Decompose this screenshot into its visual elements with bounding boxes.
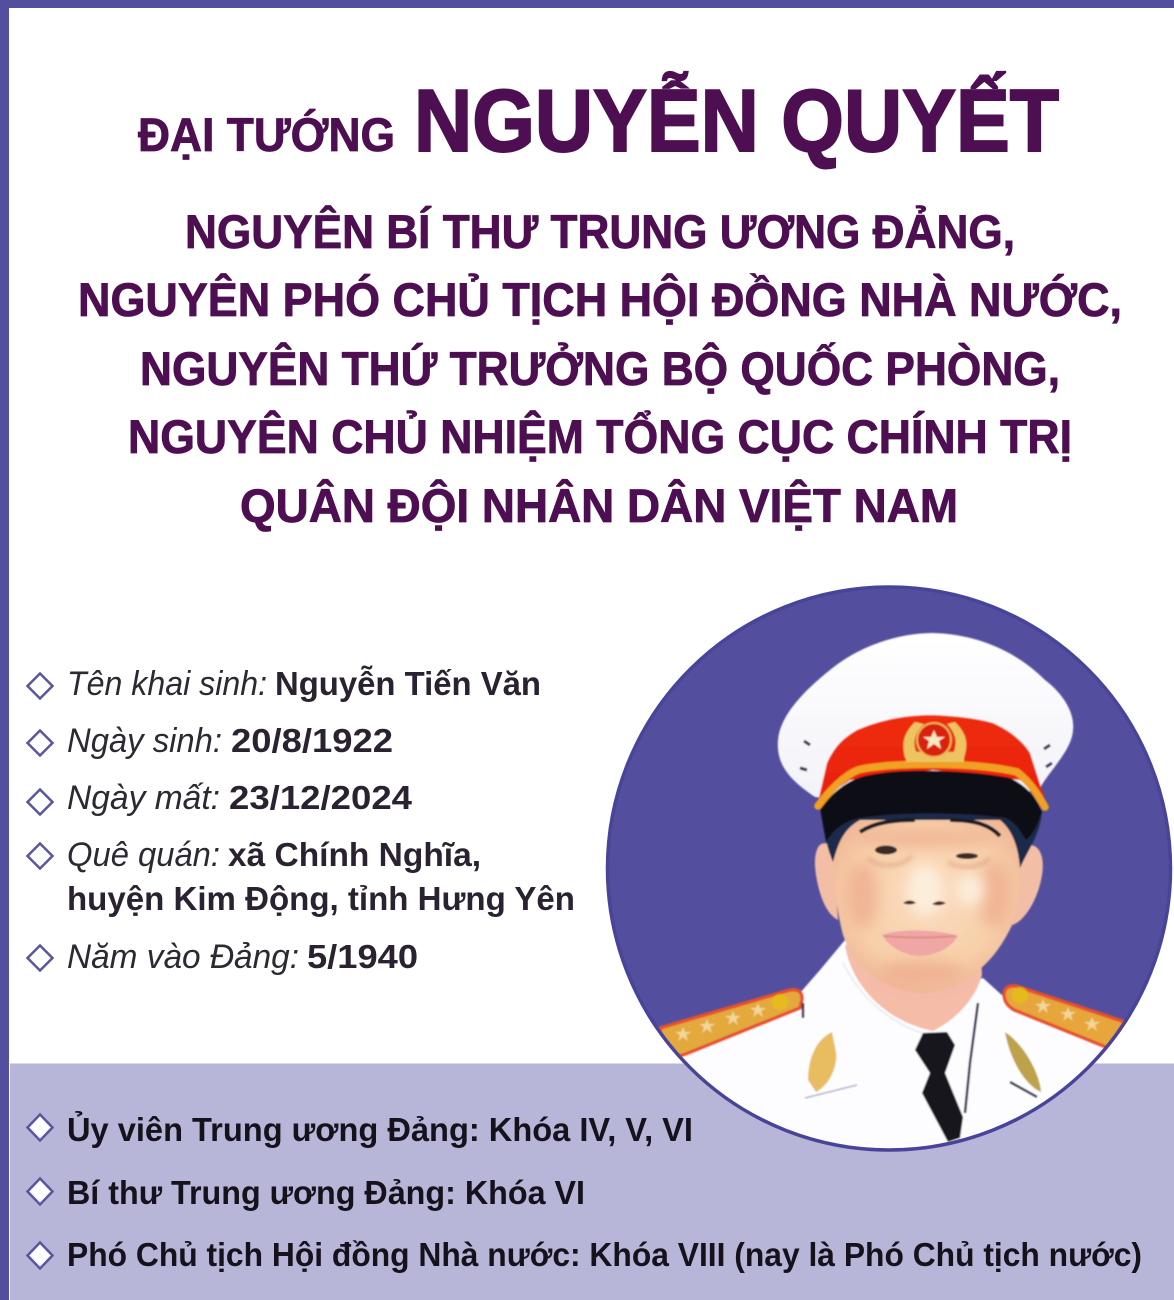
cap top <box>778 633 1073 800</box>
date of birth: Ngày sinh: <box>67 722 222 760</box>
collar leaf left <box>808 1032 836 1092</box>
cap red band <box>818 715 1045 802</box>
hometown <box>28 836 575 917</box>
subtitle: positions held: NGUYÊN PHÓ CHỦ TỊCH HỘI ĐỒNG NHÀ NƯỚC, <box>78 273 1122 326</box>
subtitle: positions held <box>78 205 1122 532</box>
central committee: Ủy viên Trung ương Đảng: Khóa IV, V, VI <box>67 1111 693 1148</box>
mouth <box>882 931 958 956</box>
vice chairman: Phó Chủ tịch Hội đồng Nhà nước: Khóa VIII (nay là Phó Chủ tịch nước) <box>67 1236 1142 1273</box>
hometown: huyện Kim Động, tỉnh Hưng Yên <box>67 880 575 917</box>
birth name <box>28 665 541 703</box>
date of death: 23/12/2024 <box>229 779 413 816</box>
face <box>829 815 1026 994</box>
date of birth: 20/8/1922 <box>231 722 393 759</box>
party entry: Năm vào Đảng: <box>67 938 299 976</box>
ears <box>815 843 838 920</box>
shoulder insignia <box>675 987 1100 1041</box>
title: ĐẠI TƯỚNG <box>138 108 395 161</box>
party entry: 5/1940 <box>307 938 418 975</box>
cap braid <box>818 764 1045 807</box>
subtitle: positions held: NGUYÊN CHỦ NHIỆM TỔNG CỤC CHÍNH TRỊ <box>128 410 1072 463</box>
neck <box>845 940 982 1031</box>
biography facts list <box>28 665 575 976</box>
right shoulder board <box>1004 986 1125 1048</box>
subtitle: positions held: NGUYÊN THỨ TRƯỞNG BỘ QUỐC PHÒNG, <box>140 342 1060 395</box>
cap badge <box>903 722 966 762</box>
party entry <box>28 938 418 976</box>
lapel lines <box>803 1003 1037 1113</box>
title <box>138 71 1059 170</box>
birth name: Nguyễn Tiến Văn <box>275 665 541 702</box>
face shading <box>846 830 1011 984</box>
hometown: xã Chính Nghĩa, <box>228 836 481 873</box>
tie <box>915 1032 963 1142</box>
subtitle: positions held: NGUYÊN BÍ THƯ TRUNG ƯƠNG ĐẢNG, <box>185 205 1015 258</box>
date of death: Ngày mất: <box>67 779 220 817</box>
face highlights <box>907 864 984 916</box>
eye bags <box>868 856 990 867</box>
collar inner shirt edge <box>843 962 925 1034</box>
eyebrows <box>860 820 1000 836</box>
collar leaf right <box>1005 1032 1041 1092</box>
nose <box>903 900 946 905</box>
portrait in circle <box>607 586 1171 1170</box>
eyes <box>875 846 897 854</box>
left shoulder board <box>660 990 802 1062</box>
cap vents <box>800 741 1052 770</box>
jacket <box>682 940 1104 1148</box>
party and state positions list <box>28 1111 1142 1300</box>
date of birth <box>28 722 393 760</box>
hair <box>823 808 1042 868</box>
title: NGUYỄN QUYẾT <box>414 71 1059 170</box>
cap visor <box>820 771 1042 842</box>
hometown: Quê quán: <box>67 836 220 874</box>
subtitle: positions held: QUÂN ĐỘI NHÂN DÂN VIỆT NAM <box>240 479 958 532</box>
date of death <box>28 779 413 817</box>
secretariat: Bí thư Trung ương Đảng: Khóa VI <box>67 1174 585 1211</box>
birth name: Tên khai sinh: <box>67 665 267 703</box>
lower info panel background <box>10 1064 1174 1300</box>
